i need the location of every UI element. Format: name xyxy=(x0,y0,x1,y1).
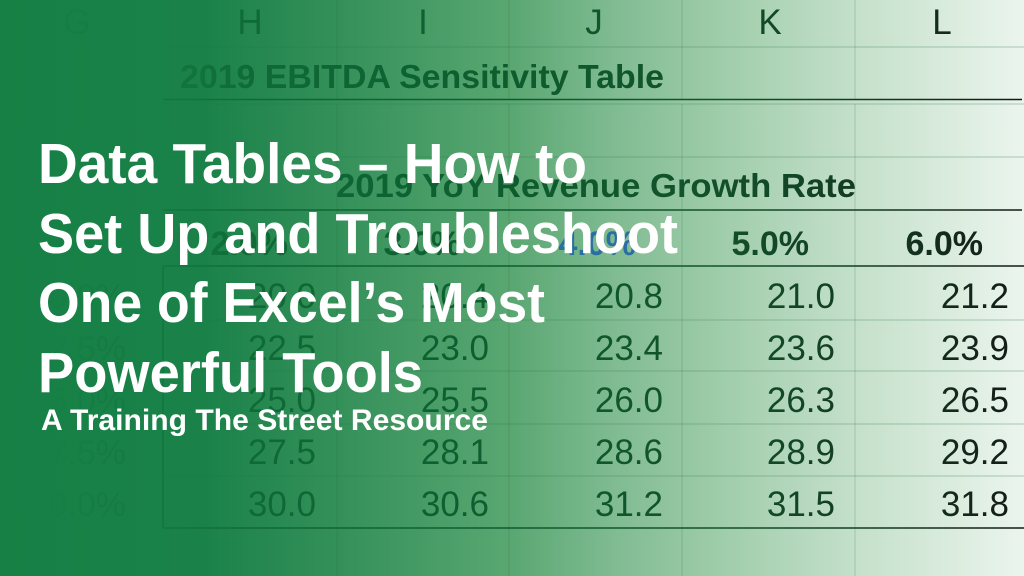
sheet heading: revenue growth: 2019 YoY Revenue Growth Rate xyxy=(336,167,856,204)
sensitivity values table: 25.0 xyxy=(248,381,316,420)
sensitivity values table xyxy=(248,277,1009,524)
title: One of Excel’s Most xyxy=(38,271,545,335)
sensitivity values table: 30.0 xyxy=(248,485,316,524)
title: Powerful Tools xyxy=(38,341,423,405)
margin row labels xyxy=(30,278,126,524)
column headers: I xyxy=(418,3,428,42)
sensitivity values table: 21.2 xyxy=(941,277,1009,316)
sensitivity values table: 25.5 xyxy=(421,381,489,420)
margin row labels: 30.0% xyxy=(30,486,126,524)
sensitivity values table: 29.2 xyxy=(941,433,1009,472)
sensitivity values table: 26.3 xyxy=(767,381,835,420)
sensitivity values table: 23.0 xyxy=(421,329,489,368)
sheet heading: EBITDA sensitivity: 2019 EBITDA Sensitivity Table xyxy=(180,58,664,95)
sensitivity values table: 28.1 xyxy=(421,433,489,472)
column headers: G xyxy=(63,3,91,42)
column headers: H xyxy=(237,3,263,42)
sensitivity values table: 20.8 xyxy=(595,277,663,316)
column headers: K xyxy=(758,3,782,42)
margin row labels: 22.5% xyxy=(30,330,126,368)
growth rate header row: 3.0% xyxy=(384,225,461,263)
sensitivity values table: 26.5 xyxy=(941,381,1009,420)
sensitivity values table: 26.0 xyxy=(595,381,663,420)
sensitivity values table: 20.4 xyxy=(421,277,489,316)
subtitle: A Training The Street Resource xyxy=(41,404,488,437)
sensitivity values table: 30.6 xyxy=(421,485,489,524)
column headers: L xyxy=(932,3,952,42)
sensitivity values table: 27.5 xyxy=(248,433,316,472)
sensitivity values table: 20.0 xyxy=(248,277,316,316)
sensitivity values table: 23.6 xyxy=(767,329,835,368)
margin row labels: 25.0% xyxy=(30,382,126,420)
column headers: J xyxy=(585,3,603,42)
title: Set Up and Troubleshoot xyxy=(38,202,678,266)
sensitivity values table: 28.9 xyxy=(767,433,835,472)
growth rate header row: 6.0% xyxy=(906,225,983,263)
growth rate header row: 5.0% xyxy=(732,225,809,263)
margin row labels: 20.0% xyxy=(30,278,126,316)
sensitivity values table: 21.0 xyxy=(767,277,835,316)
title xyxy=(38,132,678,405)
growth rate header row xyxy=(210,225,983,263)
column headers xyxy=(63,3,952,42)
margin row labels: 27.5% xyxy=(30,434,126,472)
sensitivity values table: 31.8 xyxy=(941,485,1009,524)
growth rate header row: 4.0% xyxy=(558,225,636,263)
sensitivity values table: 28.6 xyxy=(595,433,663,472)
growth rate header row: 2.0% xyxy=(210,225,288,263)
sensitivity values table: 23.4 xyxy=(595,329,663,368)
sensitivity values table: 31.5 xyxy=(767,485,835,524)
title: Data Tables – How to xyxy=(38,132,587,196)
sensitivity values table: 22.5 xyxy=(248,329,316,368)
sensitivity values table: 31.2 xyxy=(595,485,663,524)
sensitivity values table: 23.9 xyxy=(941,329,1009,368)
